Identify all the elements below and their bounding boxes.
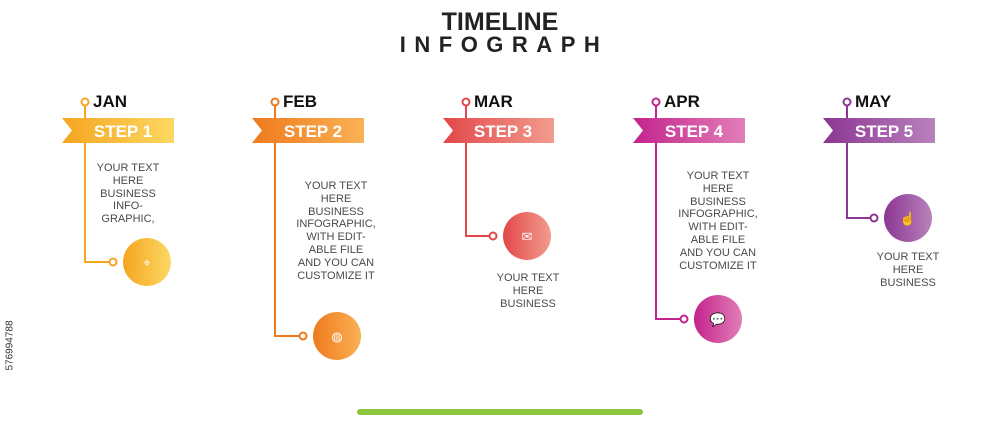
progress bar	[357, 409, 643, 415]
text 1: BUSINESS	[100, 188, 156, 200]
step 2	[252, 98, 364, 360]
text 1: HERE	[113, 175, 143, 187]
text 2: AND YOU CAN	[298, 257, 374, 269]
title: INFOGRAPH	[400, 32, 608, 57]
text 4: ABLE FILE	[691, 234, 745, 246]
text 3: BUSINESS	[500, 298, 556, 310]
text 2: HERE	[321, 193, 351, 205]
text 4: YOUR TEXT	[687, 170, 749, 182]
month MAR: MAR	[474, 92, 513, 111]
text 4: WITH EDIT-	[688, 221, 748, 233]
step 4	[633, 98, 745, 343]
step 3: ✉	[522, 229, 533, 244]
text 1: GRAPHIC,	[101, 213, 155, 225]
text 2	[296, 180, 376, 282]
month JAN: JAN	[93, 92, 127, 111]
text 2: BUSINESS	[308, 206, 364, 218]
title	[400, 8, 608, 57]
step 3	[443, 98, 554, 260]
step 2: ◍	[331, 329, 343, 344]
text 3	[496, 272, 560, 310]
side id: 576994788	[4, 320, 16, 371]
text 2: YOUR TEXT	[305, 180, 367, 192]
month APR: APR	[664, 92, 700, 111]
step 2: STEP 2	[284, 122, 342, 141]
text 4: INFOGRAPHIC,	[678, 208, 758, 220]
text 1: INFO-	[113, 200, 143, 212]
text 4: BUSINESS	[690, 196, 746, 208]
step 5: STEP 5	[855, 122, 913, 141]
month FEB: FEB	[283, 92, 317, 111]
text 1	[96, 162, 160, 225]
step 4: 💬	[710, 312, 726, 327]
text 4	[678, 170, 758, 272]
step 1: STEP 1	[94, 122, 152, 141]
text 5: BUSINESS	[880, 277, 936, 289]
step 3: STEP 3	[474, 122, 532, 141]
text 4: AND YOU CAN	[680, 247, 756, 259]
text 2: WITH EDIT-	[306, 231, 366, 243]
text 5: HERE	[893, 264, 923, 276]
text 2: INFOGRAPHIC,	[296, 218, 376, 230]
text 4: CUSTOMIZE IT	[679, 260, 757, 272]
text 4: HERE	[703, 183, 733, 195]
step 5: ☝	[900, 210, 916, 227]
text 3: YOUR TEXT	[497, 272, 559, 284]
text 2: CUSTOMIZE IT	[297, 270, 375, 282]
step 1: ⌖	[143, 255, 151, 270]
step 1	[62, 98, 174, 286]
step 4: STEP 4	[665, 122, 724, 141]
title: TIMELINE	[442, 8, 558, 36]
month MAY: MAY	[855, 92, 891, 111]
text 3: HERE	[513, 285, 543, 297]
text 5: YOUR TEXT	[877, 251, 939, 263]
text 5	[876, 251, 940, 289]
text 1: YOUR TEXT	[97, 162, 159, 174]
step 5	[823, 98, 935, 242]
text 2: ABLE FILE	[309, 244, 363, 256]
